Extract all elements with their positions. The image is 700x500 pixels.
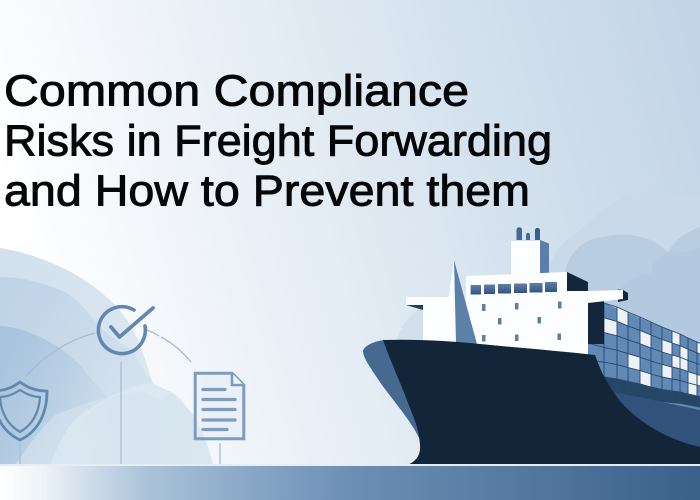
container stacks: [588, 303, 700, 420]
hull bow highlight: [363, 340, 430, 440]
funnels: [516, 227, 540, 240]
compliance hills: [0, 248, 213, 465]
waterline: [0, 464, 700, 466]
icon: check mark in circle: [98, 307, 153, 354]
sea band: [0, 466, 700, 500]
connector arc and lines: [20, 330, 220, 465]
clouds behind ship: [395, 193, 700, 420]
icon: document: [195, 373, 244, 439]
white containers: [604, 307, 700, 396]
title: Risks in Freight Forwarding: [4, 116, 552, 166]
left bridge wing: [406, 297, 456, 343]
mast sail: [442, 260, 477, 344]
bridge windows: [471, 282, 557, 294]
hull side band: [612, 392, 700, 450]
white superstructure: [466, 272, 623, 356]
title: Common Compliance: [4, 66, 469, 116]
portholes: [482, 302, 562, 342]
bridge wing shadow: [567, 272, 628, 344]
dark hull: [383, 340, 700, 465]
title: and How to Prevent them: [4, 166, 530, 216]
funnel tower: [511, 240, 549, 274]
container grid lines: [588, 303, 700, 407]
icon: shield: [0, 382, 47, 440]
title: [4, 66, 552, 216]
container ship: [363, 227, 700, 465]
